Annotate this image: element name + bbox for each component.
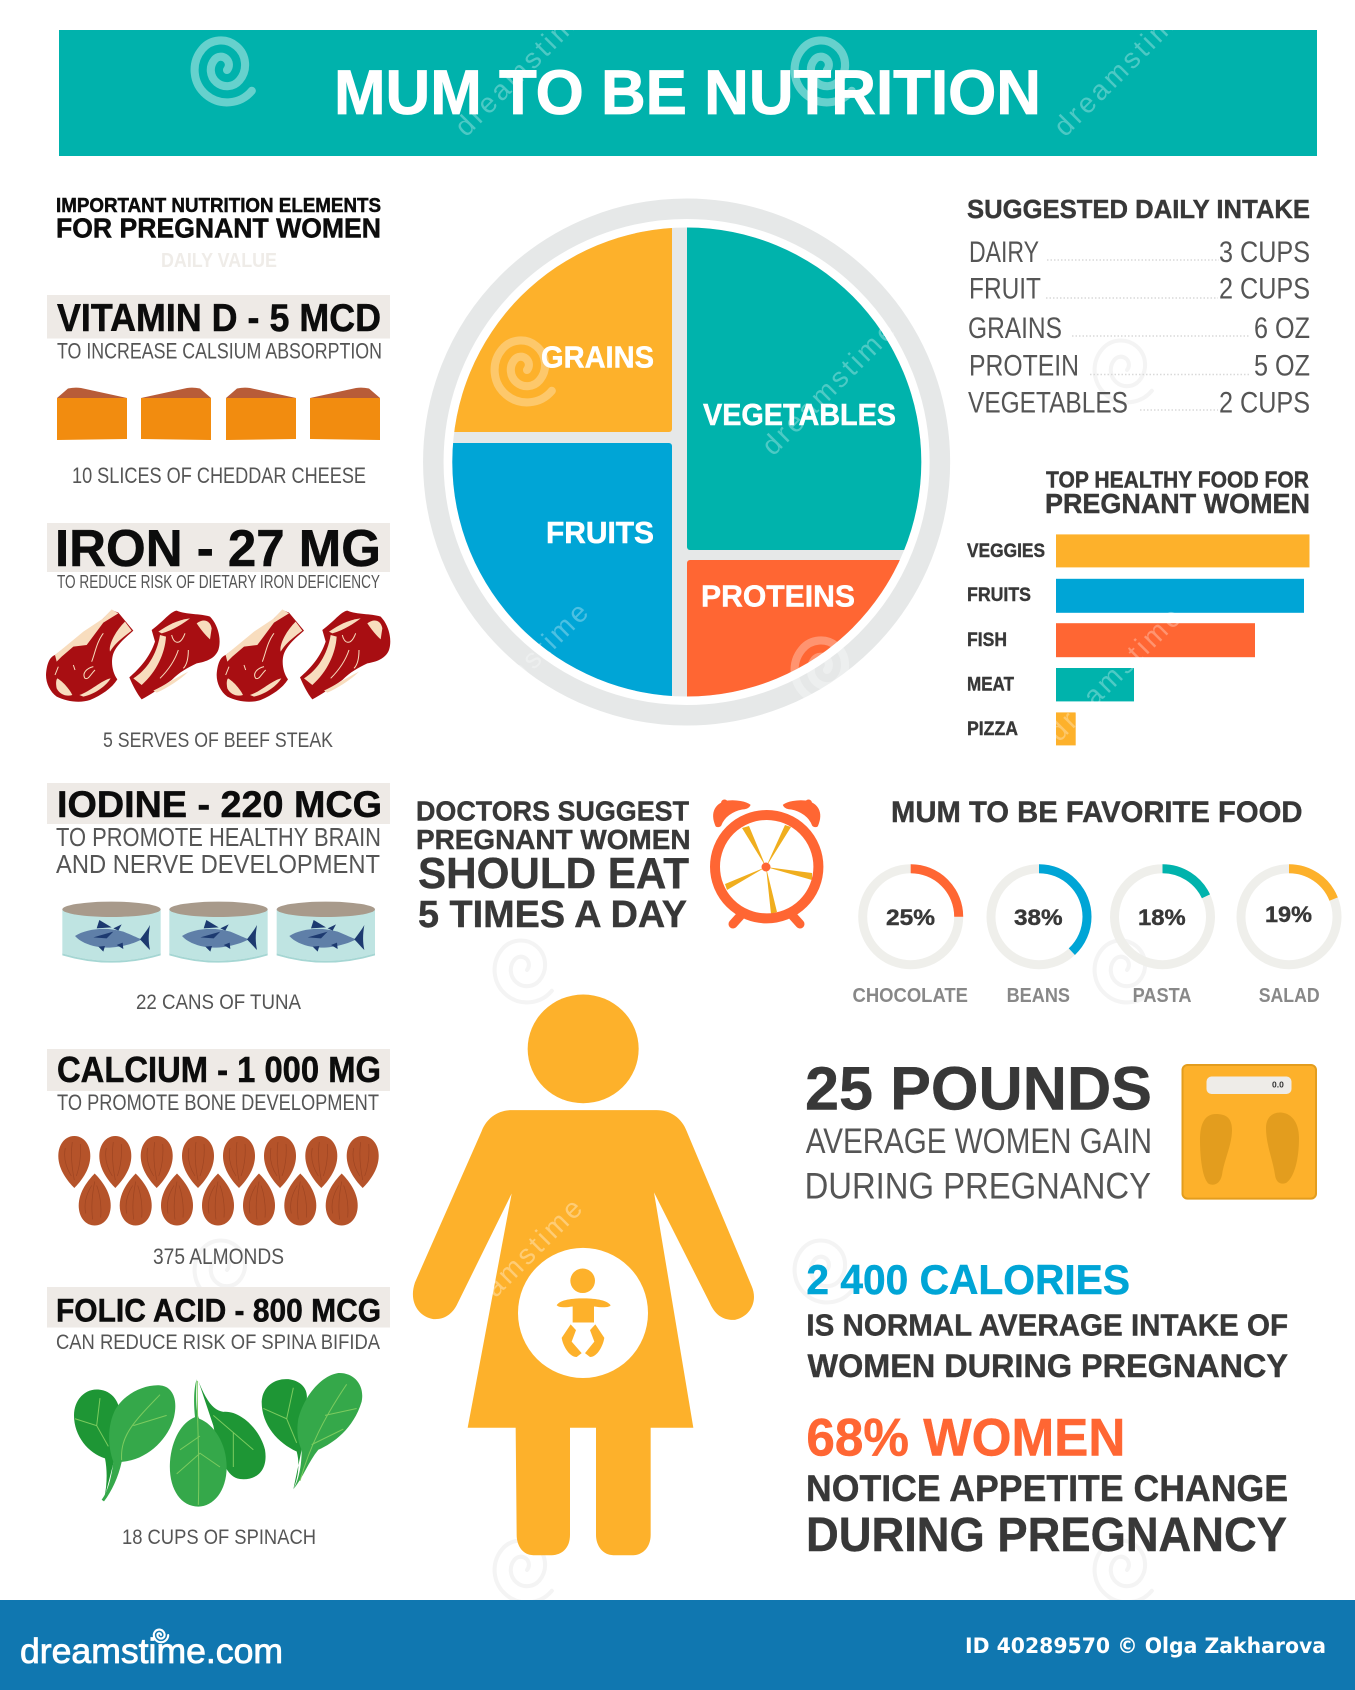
text block: doctors suggest: 5 TIMES A DAY — [418, 894, 687, 936]
table: suggested daily intake: PROTEIN — [969, 349, 1079, 382]
chart: mum to be favorite food: MUM TO BE FAVORITE FOOD — [891, 796, 1302, 829]
title banner: dreamstime — [448, 0, 594, 142]
table: suggested daily intake: 5 OZ — [1254, 349, 1310, 382]
chart: top healthy food: FRUITS — [967, 584, 1031, 606]
footer logo: dreamstime.com — [20, 1632, 283, 1671]
panel: iodine: TO PROMOTE HEALTHY BRAIN — [56, 822, 381, 852]
panel: calcium: 375 ALMONDS — [153, 1244, 284, 1269]
footer bar — [0, 1600, 1355, 1690]
table: suggested daily intake: VEGETABLES — [968, 386, 1128, 419]
panel: folic acid: FOLIC ACID - 800 MCG — [56, 1292, 381, 1328]
ring: pasta — [1114, 869, 1210, 1007]
heading: nutrition elements: DAILY VALUE — [161, 250, 277, 272]
panel: vitamin D — [47, 295, 390, 488]
text block: 25 pounds: AVERAGE WOMEN GAIN — [806, 1122, 1152, 1161]
title banner: MUM TO BE NUTRITION — [334, 58, 1041, 128]
heading: nutrition elements: IMPORTANT NUTRITION ELEMENTS — [56, 194, 381, 217]
icon: tuna cans — [62, 902, 375, 963]
text block: 2400 calories: WOMEN DURING PREGNANCY — [808, 1348, 1288, 1384]
panel: iron: TO REDUCE RISK OF DIETARY IRON DEFICIENCY — [57, 572, 380, 592]
ring: beans: 38% — [1014, 905, 1063, 930]
ring: chocolate: 25% — [886, 905, 935, 930]
ring: salad — [1241, 869, 1337, 1007]
chart: top healthy food: FISH — [967, 629, 1007, 651]
text block: 25 pounds: DURING PREGNANCY — [805, 1166, 1151, 1207]
icon: almonds — [58, 1136, 379, 1226]
panel: folic acid: CAN REDUCE RISK OF SPINA BIFIDA — [56, 1331, 380, 1354]
chart: top healthy food: VEGGIES — [967, 540, 1045, 562]
table: suggested daily intake: FRUIT — [969, 273, 1041, 306]
text block: 2400 calories: 2 400 CALORIES — [806, 1256, 1130, 1303]
chart: top healthy food: dreamstime — [1041, 601, 1187, 747]
text block: 25 pounds: 25 POUNDS — [805, 1054, 1152, 1122]
icon: spinach leaves — [74, 1373, 362, 1507]
chart: top healthy food: MEAT — [967, 674, 1014, 696]
text block: doctors suggest: SHOULD EAT — [418, 849, 689, 898]
watermark on figure: dreamstime — [442, 1192, 588, 1338]
ring: salad: 19% — [1265, 902, 1312, 927]
chart: food plate: dreamstime — [448, 596, 594, 742]
icon: alarm clock — [714, 800, 820, 924]
icon: pregnant woman figure — [413, 995, 754, 1555]
heading: nutrition elements — [56, 194, 381, 272]
chart: food plate: dreamstime — [755, 315, 901, 461]
ring: beans: BEANS — [1007, 985, 1070, 1007]
panel: calcium — [47, 1049, 390, 1269]
chart: top healthy food: PREGNANT WOMEN — [1045, 488, 1310, 519]
text block: 2400 calories — [806, 1256, 1288, 1384]
panel: iron: 5 SERVES OF BEEF STEAK — [103, 729, 333, 752]
text block: 68 percent women — [806, 1409, 1288, 1562]
table: suggested daily intake: 2 CUPS — [1219, 386, 1310, 419]
panel: calcium: TO PROMOTE BONE DEVELOPMENT — [57, 1090, 379, 1115]
chart: food plate: GRAINS — [541, 340, 654, 374]
panel: iodine: AND NERVE DEVELOPMENT — [56, 849, 380, 879]
table: suggested daily intake: 6 OZ — [1254, 312, 1310, 345]
heading: nutrition elements: FOR PREGNANT WOMEN — [56, 212, 381, 244]
chart: food plate: VEGETABLES — [703, 397, 896, 432]
panel: vitamin D: TO INCREASE CALSIUM ABSORPTION — [57, 338, 382, 364]
chart: food plate: FRUITS — [546, 515, 654, 550]
panel: vitamin D: 10 SLICES OF CHEDDAR CHEESE — [72, 463, 366, 488]
panel: iodine: IODINE - 220 MCG — [57, 784, 382, 825]
text block: 68 percent women: DURING PREGNANCY — [806, 1509, 1287, 1562]
ring: chocolate — [852, 869, 968, 1007]
table: suggested daily intake: 3 CUPS — [1219, 236, 1310, 269]
title banner — [59, 0, 1317, 156]
panel: iodine: 22 CANS OF TUNA — [136, 991, 301, 1014]
panel: calcium: CALCIUM - 1 000 MG — [57, 1049, 381, 1090]
icon: cheese slices — [57, 388, 380, 440]
chart: top healthy food: PIZZA — [967, 718, 1018, 740]
icon: bathroom scale: 0.0 — [1272, 1080, 1284, 1090]
text block: doctors suggest: PREGNANT WOMEN — [416, 824, 690, 855]
ring: salad: SALAD — [1259, 985, 1320, 1007]
table: suggested daily intake: SUGGESTED DAILY INTAKE — [967, 194, 1310, 224]
icon: beef steaks — [46, 609, 390, 702]
chart: top healthy food: TOP HEALTHY FOOD FOR — [1046, 466, 1309, 492]
plate rim — [433, 209, 940, 715]
panel: folic acid: 18 CUPS OF SPINACH — [122, 1526, 316, 1549]
text block: doctors suggest — [416, 796, 690, 936]
panel: vitamin D: VITAMIN D - 5 MCD — [57, 297, 381, 340]
title banner: dreamstime — [1047, 0, 1193, 142]
icon: baby — [518, 1248, 648, 1378]
table: suggested daily intake: DAIRY — [969, 236, 1039, 269]
ring: pasta: 18% — [1138, 905, 1186, 930]
faint watermark spirals — [181, 331, 1167, 1616]
table: suggested daily intake — [967, 194, 1310, 419]
ring: chocolate: CHOCOLATE — [852, 985, 968, 1007]
icon: bathroom scale — [1182, 1065, 1316, 1199]
chart: top healthy food — [967, 466, 1310, 747]
plate segments — [452, 228, 922, 696]
ring: pasta: PASTA — [1133, 985, 1192, 1007]
footer bar: ID 40289570 © Olga Zakharova — [965, 1634, 1326, 1658]
text block: 25 pounds — [805, 1054, 1152, 1207]
table: suggested daily intake: GRAINS — [968, 312, 1062, 345]
text block: 68 percent women: NOTICE APPETITE CHANGE — [806, 1468, 1288, 1509]
chart: food plate — [433, 209, 940, 742]
panel: iron — [46, 520, 390, 752]
table: suggested daily intake: 2 CUPS — [1219, 273, 1310, 306]
panel: iodine — [47, 783, 390, 1014]
ring: beans — [991, 869, 1087, 1007]
text block: 68 percent women: 68% WOMEN — [806, 1409, 1125, 1468]
panel: folic acid — [47, 1287, 390, 1549]
chart: food plate: PROTEINS — [701, 578, 855, 614]
text block: doctors suggest: DOCTORS SUGGEST — [416, 796, 689, 827]
text block: 2400 calories: IS NORMAL AVERAGE INTAKE OF — [806, 1307, 1288, 1342]
panel: iron: IRON - 27 MG — [55, 520, 381, 578]
chart: mum to be favorite food — [852, 796, 1337, 1007]
